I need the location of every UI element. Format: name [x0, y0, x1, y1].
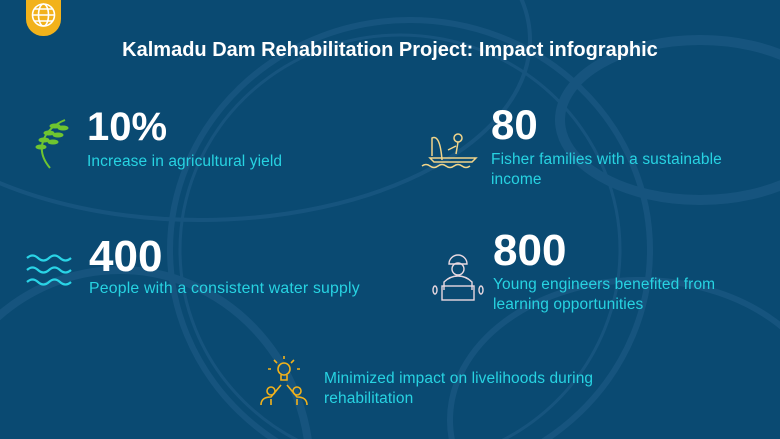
- stat: 10%: [87, 105, 282, 170]
- stat: 800: learning opportunities: [493, 296, 643, 313]
- stat: 80: Fisher families with a sustainable: [491, 151, 722, 168]
- stat: 400: People with a consistent water supply: [89, 280, 360, 297]
- stat: 800: 800: [493, 226, 566, 275]
- stat: livelihoods: [324, 370, 593, 407]
- icon: waves: [26, 254, 72, 286]
- icon: fisher: [422, 133, 478, 168]
- stat: 10%: Increase in agricultural yield: [87, 153, 282, 170]
- logo badge: [26, 0, 61, 36]
- stat: 10%: 10%: [87, 105, 167, 149]
- stat: 400: 400: [89, 232, 162, 281]
- icon: idea people: [260, 356, 308, 405]
- icon: engineer: [432, 254, 484, 301]
- icon: wheat: [36, 119, 68, 168]
- stat: 80: income: [491, 171, 542, 188]
- stat: 80: [491, 101, 722, 188]
- stat: livelihoods: Minimized impact on livelihoods during: [324, 370, 593, 387]
- stat: 80: 80: [491, 101, 538, 148]
- stat: 800: [493, 226, 715, 313]
- stat: 800: Young engineers benefited from: [493, 276, 715, 293]
- stat: 400: [89, 232, 360, 297]
- title: Kalmadu Dam Rehabilitation Project: Impact infographic: [122, 39, 658, 61]
- stat: livelihoods: rehabilitation: [324, 390, 413, 407]
